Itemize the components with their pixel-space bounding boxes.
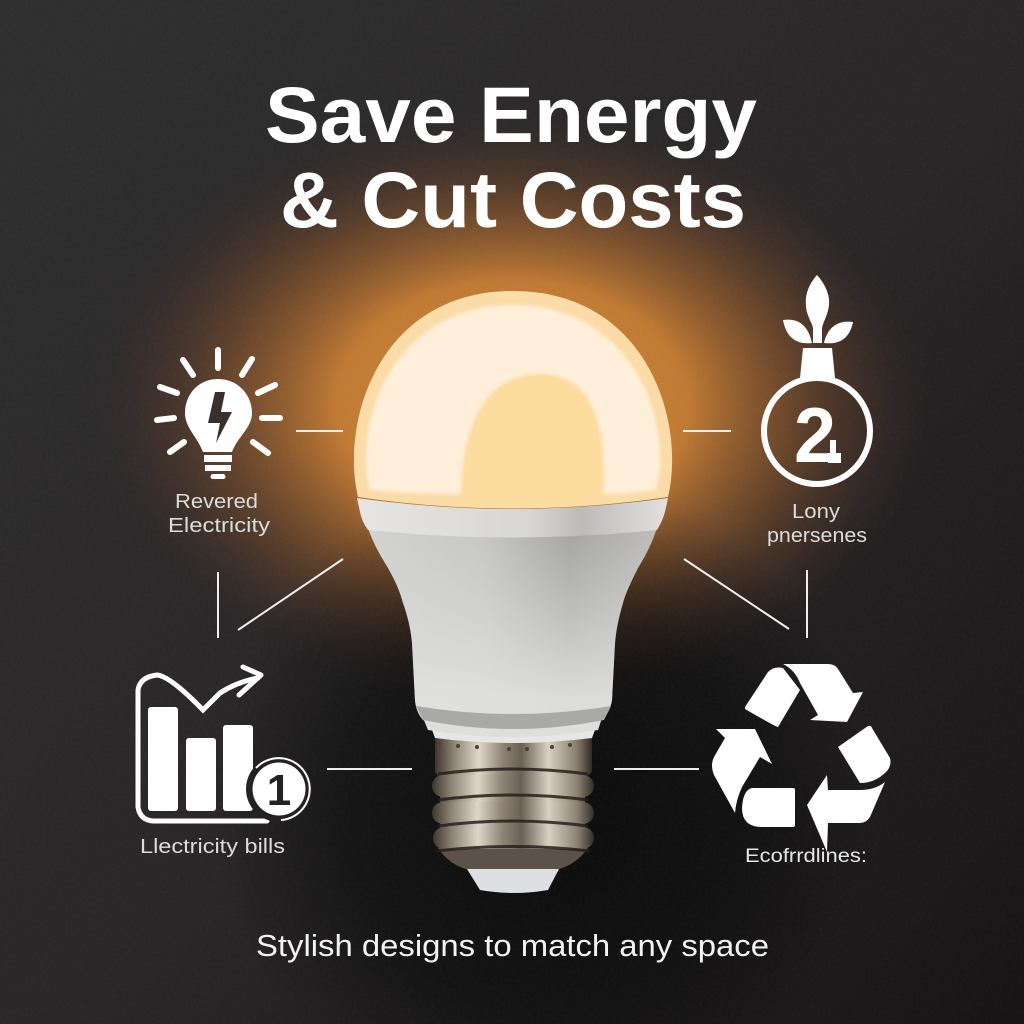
plant leaves xyxy=(783,275,853,343)
title xyxy=(265,70,757,244)
arrow head xyxy=(239,667,261,695)
label: revered electricity xyxy=(168,491,270,537)
flask neck xyxy=(800,348,835,378)
label: lony pnersenes: Lony xyxy=(792,501,840,523)
number 2: 2 xyxy=(794,391,836,479)
icon bulb shape xyxy=(185,379,252,452)
label: revered electricity: Revered xyxy=(175,491,258,513)
bulb screw base xyxy=(432,738,594,893)
icon: electricity bulb xyxy=(157,350,280,479)
lower shadow xyxy=(200,470,1024,1024)
label: revered electricity: Electricity xyxy=(168,515,270,537)
icon bolt xyxy=(208,392,232,443)
bars xyxy=(148,707,253,811)
collar band xyxy=(357,498,668,538)
right arrows xyxy=(838,726,890,783)
title: & Cut Costs xyxy=(280,155,746,244)
icon base xyxy=(204,455,232,479)
left arrows xyxy=(712,729,772,813)
body highlight xyxy=(368,528,657,729)
bulb globe xyxy=(354,291,672,508)
tagline: Stylish designs to match any space xyxy=(256,928,769,963)
globe bright area xyxy=(366,305,660,494)
light bulb xyxy=(354,291,672,893)
icon: recycle xyxy=(712,664,890,852)
number tail xyxy=(828,440,841,463)
connector lines xyxy=(218,431,807,769)
bulb body xyxy=(368,528,657,729)
label: lony pnersenes: pnersenes xyxy=(767,525,867,547)
chart frame and trend line xyxy=(138,675,267,821)
bulb neck rings xyxy=(423,718,602,743)
icon: bar chart bills xyxy=(138,667,312,822)
flask ring xyxy=(764,378,870,484)
label: ecofriendliness: Ecofrrdlines: xyxy=(745,846,867,867)
globe bright and dome xyxy=(366,305,660,506)
body ring shadow xyxy=(416,706,611,729)
globe inner dome xyxy=(461,374,604,506)
number badge: 1 xyxy=(267,766,291,815)
icon: plant flask with number xyxy=(764,275,870,484)
title: Save Energy xyxy=(265,70,757,159)
top arrows xyxy=(745,668,800,727)
label: electricity bills: Llectricity bills xyxy=(140,836,285,858)
icon rays xyxy=(157,350,280,453)
label: lony pnersenes xyxy=(767,501,867,547)
number badge xyxy=(246,756,312,822)
